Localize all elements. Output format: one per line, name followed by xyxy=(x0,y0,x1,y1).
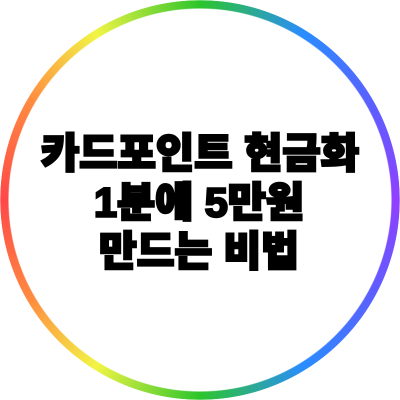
title line 2: 1분에 5만원 xyxy=(94,180,304,226)
title line 3: 만드는 비법 xyxy=(99,228,299,274)
title line 1: 카드포인트 현금화 xyxy=(41,130,359,176)
